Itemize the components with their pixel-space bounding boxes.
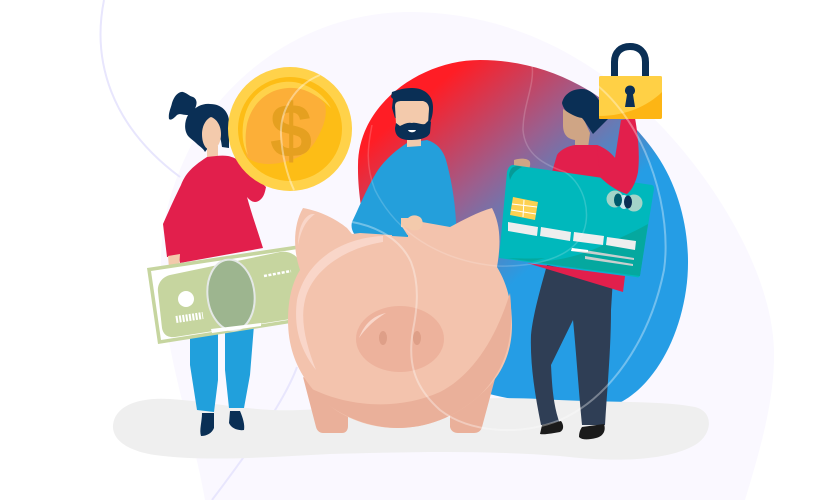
credit card <box>499 165 654 277</box>
person hand on card <box>514 159 530 172</box>
woman shoes <box>200 411 244 436</box>
woman trousers <box>190 325 254 412</box>
coin highlight line <box>281 75 320 190</box>
woman hand <box>168 254 180 272</box>
man beard <box>395 120 431 140</box>
pig belly shade <box>310 293 511 428</box>
pig highlight <box>296 236 383 370</box>
pig snout <box>356 306 444 372</box>
card chip <box>510 197 538 220</box>
person trousers <box>531 265 613 425</box>
banknote <box>147 245 310 344</box>
woman sweater <box>163 156 266 263</box>
man hand <box>401 215 423 230</box>
man face <box>395 101 429 134</box>
banknote oval <box>204 257 258 333</box>
ground shadow <box>113 398 709 460</box>
person: woman with coin and bill <box>147 67 352 436</box>
man smile <box>408 130 416 132</box>
pig nostrils <box>379 331 387 345</box>
second highlight line <box>368 65 587 266</box>
man sweater <box>352 140 458 245</box>
padlock <box>599 46 662 119</box>
decorative lavender line <box>101 0 297 500</box>
card logo <box>606 190 624 208</box>
woman neck and face <box>202 117 221 158</box>
person: man with beard <box>352 88 458 245</box>
person raised arm <box>597 118 639 194</box>
person: woman with card and padlock <box>499 46 662 439</box>
person hair <box>562 89 608 134</box>
gradient blob <box>358 60 688 407</box>
person sweater <box>552 145 640 190</box>
pig body <box>288 208 512 428</box>
card number strips <box>508 222 636 250</box>
person face and neck <box>563 109 590 148</box>
person lower sweater <box>527 263 625 292</box>
person shoes <box>540 421 605 439</box>
man hair <box>391 88 433 122</box>
piggy bank <box>288 208 512 433</box>
keyhole <box>625 86 635 107</box>
illustration: people with piggy bank <box>100 0 709 500</box>
woman hair <box>169 92 229 152</box>
man neck <box>407 138 421 147</box>
flowing highlight line <box>352 86 666 430</box>
background blob <box>161 12 774 500</box>
dollar sign: $ <box>270 89 312 174</box>
gold coin <box>228 67 352 191</box>
banknote details <box>178 291 194 307</box>
